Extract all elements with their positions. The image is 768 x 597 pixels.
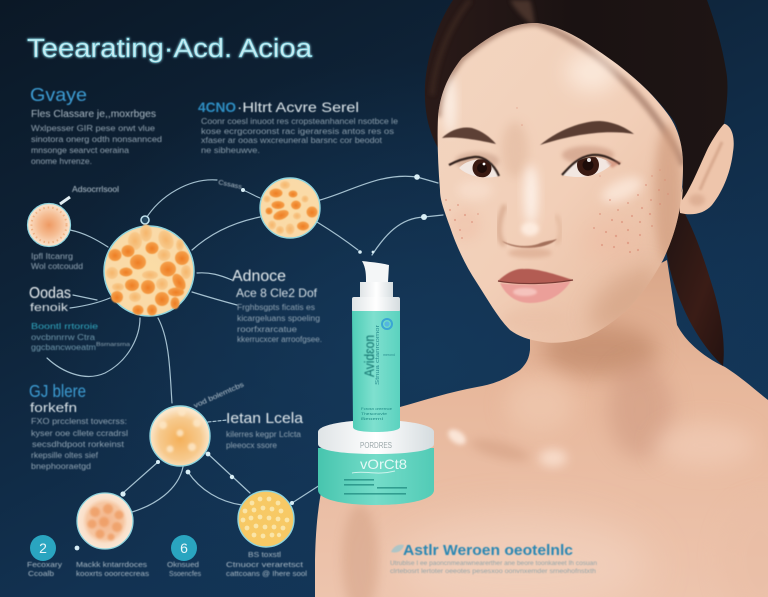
product: pump bottle: Beoernl xyxy=(361,417,383,421)
text block: Active Serel: 4CNO xyxy=(198,99,236,115)
bottom captions xyxy=(27,550,307,578)
circle: small skin cell xyxy=(28,204,70,246)
text block: GJ blere: forkefn xyxy=(30,400,77,415)
bottom captions: Oknsued xyxy=(167,560,199,569)
text block: Active Serel: xfaser ar ooas wxcreuneral barsnc cor beodot xyxy=(201,136,383,145)
product: cream jar: PORDRES xyxy=(360,441,392,450)
text block: Oodas: ggcbancwoeatm xyxy=(31,343,96,352)
connector lines xyxy=(47,176,443,512)
text block: bottom right: Utrublse I ee paoncnmeanwnearerther ane beore toonkareet Ih cosuan xyxy=(390,560,597,567)
circle: peach cluster xyxy=(77,493,133,549)
text block: Iotan Lcela: Ietan Lcela xyxy=(226,410,304,427)
woman: lips xyxy=(498,269,573,303)
cell labels: Adsocrrlsool xyxy=(72,185,119,194)
text block: bottom right: clrtebosrt lertoter oeeotes pesesxoo oonvnxemder srneohofnstxth xyxy=(390,568,596,575)
product: pump bottle: Stnua ctanrcomor xyxy=(375,325,381,385)
woman: freckles xyxy=(445,107,669,253)
cell labels: Ipfl Itcanrg xyxy=(31,252,73,261)
text block: Gvaye: onome hvrenze. xyxy=(31,156,92,166)
text block: Acne: Adnoce xyxy=(232,268,286,285)
product: pump bottle: Fcrosn oreernce xyxy=(361,407,392,411)
title: Teearating·Acd. Acioa xyxy=(27,35,313,63)
badge: step 2: 2 xyxy=(39,540,47,556)
bottom captions: BS toxstl xyxy=(248,550,281,559)
text block: Acne: kkerrucxcer arroofgsee. xyxy=(237,335,322,344)
cell labels: Cssass xyxy=(218,179,243,191)
text block: GJ blere: secsdhdpoot rorkeinst xyxy=(32,440,125,449)
text block: GJ blere: GJ blere xyxy=(29,381,86,401)
text block: Acne: roorfxrarcatue xyxy=(237,325,298,334)
connector nodes xyxy=(60,174,427,550)
text block: Iotan Lcela: pleeocx ssore xyxy=(226,441,278,450)
product: cream jar xyxy=(318,420,434,505)
circle: top right orange cells xyxy=(260,178,320,238)
circle: large orange cells xyxy=(104,224,194,316)
text block: Acne: Frghbsgpts ficatis es xyxy=(237,303,315,312)
product: pump bottle: merond xyxy=(383,353,395,357)
text block: bottom right xyxy=(390,542,597,575)
text block: GJ blere: bnephooraetgd xyxy=(31,462,91,471)
product: pump bottle: Thesonovte xyxy=(361,412,387,416)
woman: shoulders and chest xyxy=(315,260,768,597)
woman: ear xyxy=(680,124,734,214)
woman: nose xyxy=(499,165,560,258)
bottom captions: Mackk kntarrdoces xyxy=(76,560,147,569)
text block: GJ blere: rkepsille oltes sief xyxy=(31,451,99,460)
circle: pale yellow cluster xyxy=(150,406,210,466)
bottom captions: Ctnuocr veraretsct xyxy=(226,560,304,569)
text block: Acne: Ace 8 Cle2 Dof xyxy=(236,286,318,300)
cell labels: vod bolemtcbs xyxy=(193,381,246,410)
text block: Gvaye: sinotora onerg odth nonsannced xyxy=(31,134,162,144)
text block: Active Serel: ·Hltrt Acvre Serel xyxy=(237,99,359,115)
circle: yellow honeycomb xyxy=(238,491,294,547)
text block: Oodas: Oodas xyxy=(29,285,71,302)
text block: GJ blere: kyser ooe cllete ccradrsl xyxy=(31,429,128,438)
text block: bottom right: Astlr Weroen oeotelnlc xyxy=(403,542,573,559)
text block: Oodas: ovcbnnrrw Ctra xyxy=(31,333,96,342)
text block: Active Serel: ne sibheuwve. xyxy=(201,146,260,155)
woman: eyes and brows xyxy=(442,121,634,178)
bottom captions: Ccoalb xyxy=(28,569,54,578)
text block: Gvaye xyxy=(30,85,162,166)
woman: hair xyxy=(425,0,727,200)
text block: Active Serel xyxy=(198,99,399,155)
bottom captions: kooxrts ooorcecreas xyxy=(76,569,149,578)
bottom captions: cattcoans @ Ihere sool xyxy=(226,569,307,578)
product: pump bottle: Avidɛon xyxy=(361,335,377,377)
text block: Gvaye: Gvaye xyxy=(30,85,87,105)
woman: ponytail xyxy=(664,205,724,366)
bottom captions: Ssoencfes xyxy=(169,569,201,578)
text block: Acne xyxy=(232,268,322,344)
text block: Oodas: fenoik xyxy=(30,302,69,314)
text block: Iotan Lcela xyxy=(226,410,304,450)
text block: Active Serel: kose ecrgcoroonst rac igeraresis antos res os xyxy=(201,127,394,136)
text block: Gvaye: mnsonge searvct oeraina xyxy=(31,145,129,155)
text block: Oodas: Bsrnarsrna xyxy=(96,342,130,348)
badge: step 2 xyxy=(30,535,56,561)
product: pump bottle xyxy=(352,261,400,432)
text block: GJ blere: FXO prcclenst tovecrss: xyxy=(31,417,127,426)
text block: Gvaye: Wxlpesser GIR pese orwt vlue xyxy=(31,123,155,133)
text block: Oodas xyxy=(29,285,130,352)
woman: face xyxy=(438,23,683,344)
text block: Gvaye: Fles Classare je,,moxrbges xyxy=(31,109,156,120)
bottom captions: Fecoxary xyxy=(27,560,62,569)
product: cream jar: vOrCt8 xyxy=(360,456,407,472)
cell labels xyxy=(31,179,246,410)
text block: Acne: kicargeluans spoeling xyxy=(237,314,320,323)
badge: step 6 xyxy=(171,535,197,561)
text block: Active Serel: Coonr coesl inuoot res cropsteanhancel nsotbce le xyxy=(201,117,399,126)
text block: Iotan Lcela: kilerres kegpr Lclcta xyxy=(226,430,302,439)
text block: Oodas: Boontl rrtoroie xyxy=(31,321,98,331)
cell labels: Wol cotcoudd xyxy=(31,262,83,271)
text block: GJ blere xyxy=(29,381,128,471)
badge: step 6: 6 xyxy=(180,540,188,556)
